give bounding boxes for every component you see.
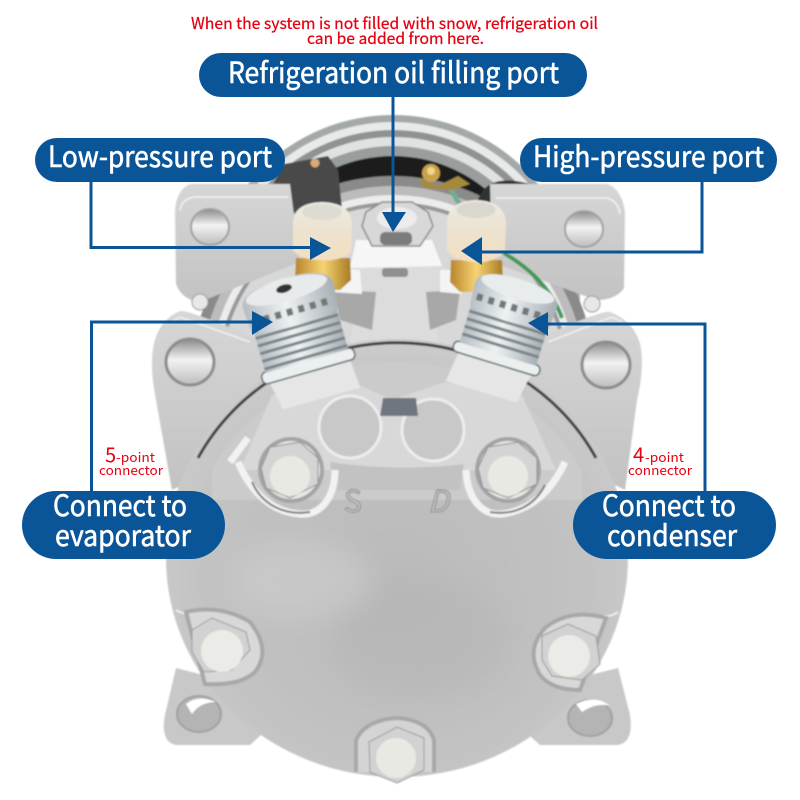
note: 5-point connector: connector xyxy=(99,460,164,479)
left bolt with recess xyxy=(186,610,262,684)
label: connect to evaporator: Connect to xyxy=(53,483,187,525)
embossed S and D letters xyxy=(344,477,452,521)
label: connect to condenser: condenser xyxy=(607,513,738,555)
right threaded fitting xyxy=(443,266,564,406)
back housing xyxy=(191,176,595,580)
port neck and circular bosses xyxy=(240,382,556,490)
bottom bolt with recess xyxy=(356,718,434,783)
green wire xyxy=(502,252,562,318)
embossed S and D letters: D xyxy=(428,477,452,521)
label: connect to evaporator xyxy=(22,483,225,559)
note: 5-point connector: -point xyxy=(116,447,155,466)
top left bolt with recess xyxy=(230,437,335,514)
label: low-pressure port: Low-pressure port xyxy=(48,134,272,176)
label: connect to evaporator: evaporator xyxy=(55,513,192,555)
terminal screw and teal wire xyxy=(418,164,470,216)
front right flange xyxy=(525,312,642,490)
arrow: low-pressure port xyxy=(91,180,331,260)
central manifold xyxy=(330,240,462,352)
arrow: high-pressure port xyxy=(461,180,702,265)
label: connect to condenser: Connect to xyxy=(602,483,736,525)
label: refrigeration oil filling port: Refrigeration oil filling port xyxy=(228,50,559,92)
front left flange xyxy=(152,311,275,490)
note: 5-point connector: 5 xyxy=(105,439,116,468)
red note about oil filling xyxy=(191,10,598,49)
arrow: oil filling port xyxy=(382,96,406,232)
left threaded fitting xyxy=(237,265,364,413)
right bolt with recess xyxy=(534,615,606,690)
low-pressure port plastic cap and brass nut xyxy=(293,202,352,290)
pulley xyxy=(206,115,580,489)
note: 4-point connector: -point xyxy=(645,447,684,466)
front cover disc xyxy=(166,339,628,777)
note: 5-point connector xyxy=(99,439,164,479)
note: 4-point connector xyxy=(628,439,693,479)
small rear screws xyxy=(192,294,600,312)
high-pressure port plastic cap and brass nut xyxy=(447,200,506,292)
hex oil plug xyxy=(362,202,433,246)
compressor illustration xyxy=(152,115,642,783)
top right bolt with recess xyxy=(466,437,565,514)
note: 4-point connector: 4 xyxy=(633,439,644,468)
back right flange xyxy=(490,184,625,300)
red note about oil filling: When the system is not filled with snow, refrigeration oil xyxy=(191,10,598,34)
lower left mounting ear xyxy=(164,668,300,745)
label: high-pressure port: High-pressure port xyxy=(533,134,764,176)
mounting bracket and dark strap xyxy=(270,156,530,214)
embossed S and D letters: S xyxy=(344,477,362,521)
back left flange xyxy=(175,184,300,302)
arrow: condenser connection xyxy=(528,312,705,492)
red note about oil filling: can be added from here. xyxy=(307,25,484,49)
label: connect to condenser xyxy=(573,483,776,559)
lower right mounting ear xyxy=(490,668,631,745)
note: 4-point connector: connector xyxy=(628,460,693,479)
arrow: evaporator connection xyxy=(92,311,273,492)
